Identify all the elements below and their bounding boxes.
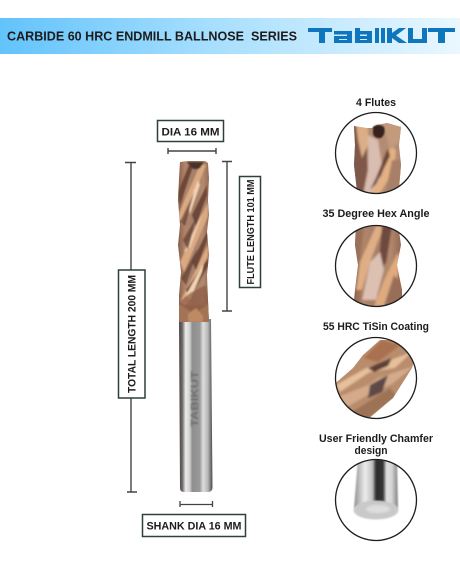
label: flute length bbox=[240, 176, 260, 288]
shank engraving: TABIKUT bbox=[190, 371, 201, 427]
icon: shank chamfer detail bbox=[354, 458, 398, 520]
dimension: shank diameter bbox=[142, 501, 246, 536]
icon: flute tip detail bbox=[354, 123, 401, 193]
fluted section bbox=[178, 161, 209, 322]
header banner bbox=[0, 18, 460, 54]
dimension: flute length bbox=[222, 162, 260, 311]
label: shank dia: SHANK DIA 16 MM bbox=[146, 520, 242, 532]
banner title: CARBIDE 60 HRC ENDMILL BALLNOSE SERIES bbox=[7, 30, 297, 44]
end mill tool bbox=[176, 160, 212, 492]
feature: chamfer bbox=[319, 433, 434, 540]
heading: 35 Degree Hex Angle bbox=[322, 208, 430, 220]
label: total length bbox=[118, 270, 145, 398]
label: total length: TOTAL LENGTH 200 MM bbox=[126, 275, 138, 393]
dimension: diameter bbox=[158, 120, 224, 154]
icon: coating detail bbox=[336, 340, 414, 418]
feature: 4 flutes bbox=[336, 97, 416, 200]
feature: hex angle bbox=[322, 208, 430, 312]
shank bbox=[179, 319, 212, 492]
label: flute length: FLUTE LENGTH 101 MM bbox=[245, 179, 257, 284]
icon: helix detail bbox=[354, 226, 402, 306]
feature: chamfer: design bbox=[354, 445, 388, 457]
logo: TABIKUT bbox=[308, 28, 455, 43]
label: dia 16 mm: DIA 16 MM bbox=[162, 126, 220, 138]
dimension: total length bbox=[118, 162, 145, 492]
feature: coating bbox=[323, 321, 429, 425]
heading: 55 HRC TiSin Coating bbox=[323, 321, 429, 333]
tip hollow bbox=[373, 125, 385, 138]
heading: 4 Flutes bbox=[356, 97, 396, 109]
heading: User Friendly Chamfer bbox=[319, 433, 434, 445]
